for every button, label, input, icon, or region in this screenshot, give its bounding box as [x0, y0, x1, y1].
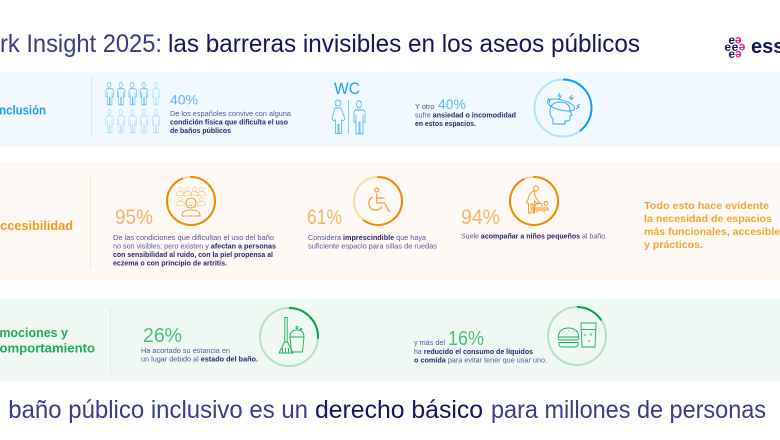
stat: 61%: [307, 206, 438, 250]
ring: 61% with wheelchair icon: [354, 177, 402, 225]
stat: 26%: un lugar debido al estado del baño.: [141, 356, 258, 364]
callout: conclusion: y prácticos.: [644, 239, 703, 251]
icon: burger and drink: [558, 323, 596, 347]
stat: otro 40% ansiedad: Y otro: [415, 104, 435, 111]
icon: ten people, four highlighted: [106, 82, 160, 133]
logo: essity: e: [738, 41, 745, 55]
stat: 16%: ha reducido el consumo de líquidos: [414, 349, 533, 356]
panel: accesibilidad: [0, 162, 780, 281]
callout: conclusion: Todo esto hace evidente: [644, 200, 769, 212]
stat: 40% condición física: de baños públicos: [170, 128, 231, 135]
stat: 26%: 26%: [143, 325, 182, 347]
stat: 40% condición física: condición física que dificulta el uso: [170, 120, 288, 126]
stat: otro 40% ansiedad: [415, 96, 516, 128]
closing statement: [0, 396, 766, 424]
logo: essity: e: [724, 40, 731, 54]
stat: 40% condición física: De los españoles convive con alguna: [170, 111, 291, 118]
ring: 40% with head icon: [534, 80, 592, 136]
panel: emociones y comportamiento: [0, 299, 780, 381]
logo: essity: [724, 33, 780, 62]
icon: head with anxiety swirl: [546, 93, 580, 124]
callout: conclusion: la necesidad de espacios: [644, 213, 772, 225]
stat: 26%: Ha acortado su estancia en: [141, 348, 230, 355]
logo: essity: e: [728, 33, 735, 47]
stat: 95%: 95%: [115, 206, 153, 229]
ring: 94% with parent and child icon: [510, 177, 558, 225]
ring: 16% with burger and drink icon: [548, 307, 606, 365]
stat: 40% condición física: 40%: [170, 92, 198, 108]
title: rk Insight 2025:: [0, 30, 162, 58]
stat: 95%: [113, 206, 276, 268]
stat: otro 40% ansiedad: sufre ansiedad o incomodidad: [415, 112, 516, 120]
stat: 40% condición física: [170, 92, 291, 135]
stat: 16%: 16%: [448, 328, 484, 350]
stat: 94%: Suele acompañar a niños pequeños al baño.: [461, 234, 607, 240]
stat: 95%: De las condiciones que dificultan el uso del baño: [113, 235, 274, 242]
panel: inclusión: [0, 72, 780, 147]
icon: WC sign: [332, 79, 365, 134]
stat: 61%: suficiente espacio para sillas de ruedas: [308, 244, 438, 250]
stat: 61%: 61%: [307, 206, 342, 229]
icon: WC sign: WC: [334, 79, 360, 98]
stat: 26%: [141, 325, 258, 364]
logo: essity: e: [728, 47, 735, 61]
stat: 95%: no son visibles; pero existen y afectan a personas: [113, 244, 276, 250]
icon: wheelchair: [369, 188, 391, 211]
logo: essity: e: [735, 48, 742, 62]
stat: 16%: [414, 328, 547, 364]
title: las barreras invisibles en los aseos públicos: [168, 30, 640, 58]
stat: otro 40% ansiedad: en estos espacios.: [415, 121, 476, 128]
stat: 95%: eczema o con principio de artritis.: [113, 260, 227, 268]
stat: 61%: Considera imprescindible que haya: [308, 235, 426, 242]
stat: 94%: [461, 206, 607, 240]
heading: emociones y comportamiento: [0, 325, 95, 356]
icon: adult changing a child: [526, 186, 548, 213]
logo: essity: e: [735, 34, 742, 48]
ring: 95% with crowd icon: [167, 177, 215, 225]
closing statement: derecho básico: [315, 396, 483, 424]
stat: 94%: 94%: [461, 206, 500, 229]
stat: 16%: o comida para evitar tener que usar uno.: [414, 358, 547, 364]
stat: 16%: y más del: [414, 340, 445, 347]
stat: otro 40% ansiedad: 40%: [438, 96, 466, 112]
ring: 26% with broom and bucket icon: [260, 308, 318, 366]
stat: 95%: con sensibilidad al ruido, con la piel propensa al: [113, 252, 273, 259]
logo: essity: e: [732, 40, 739, 54]
callout: conclusion: [644, 200, 780, 251]
icon: crowd around a person: [176, 187, 206, 216]
closing statement: para millones de personas: [491, 396, 766, 424]
icon: broom and bucket: [279, 318, 304, 353]
